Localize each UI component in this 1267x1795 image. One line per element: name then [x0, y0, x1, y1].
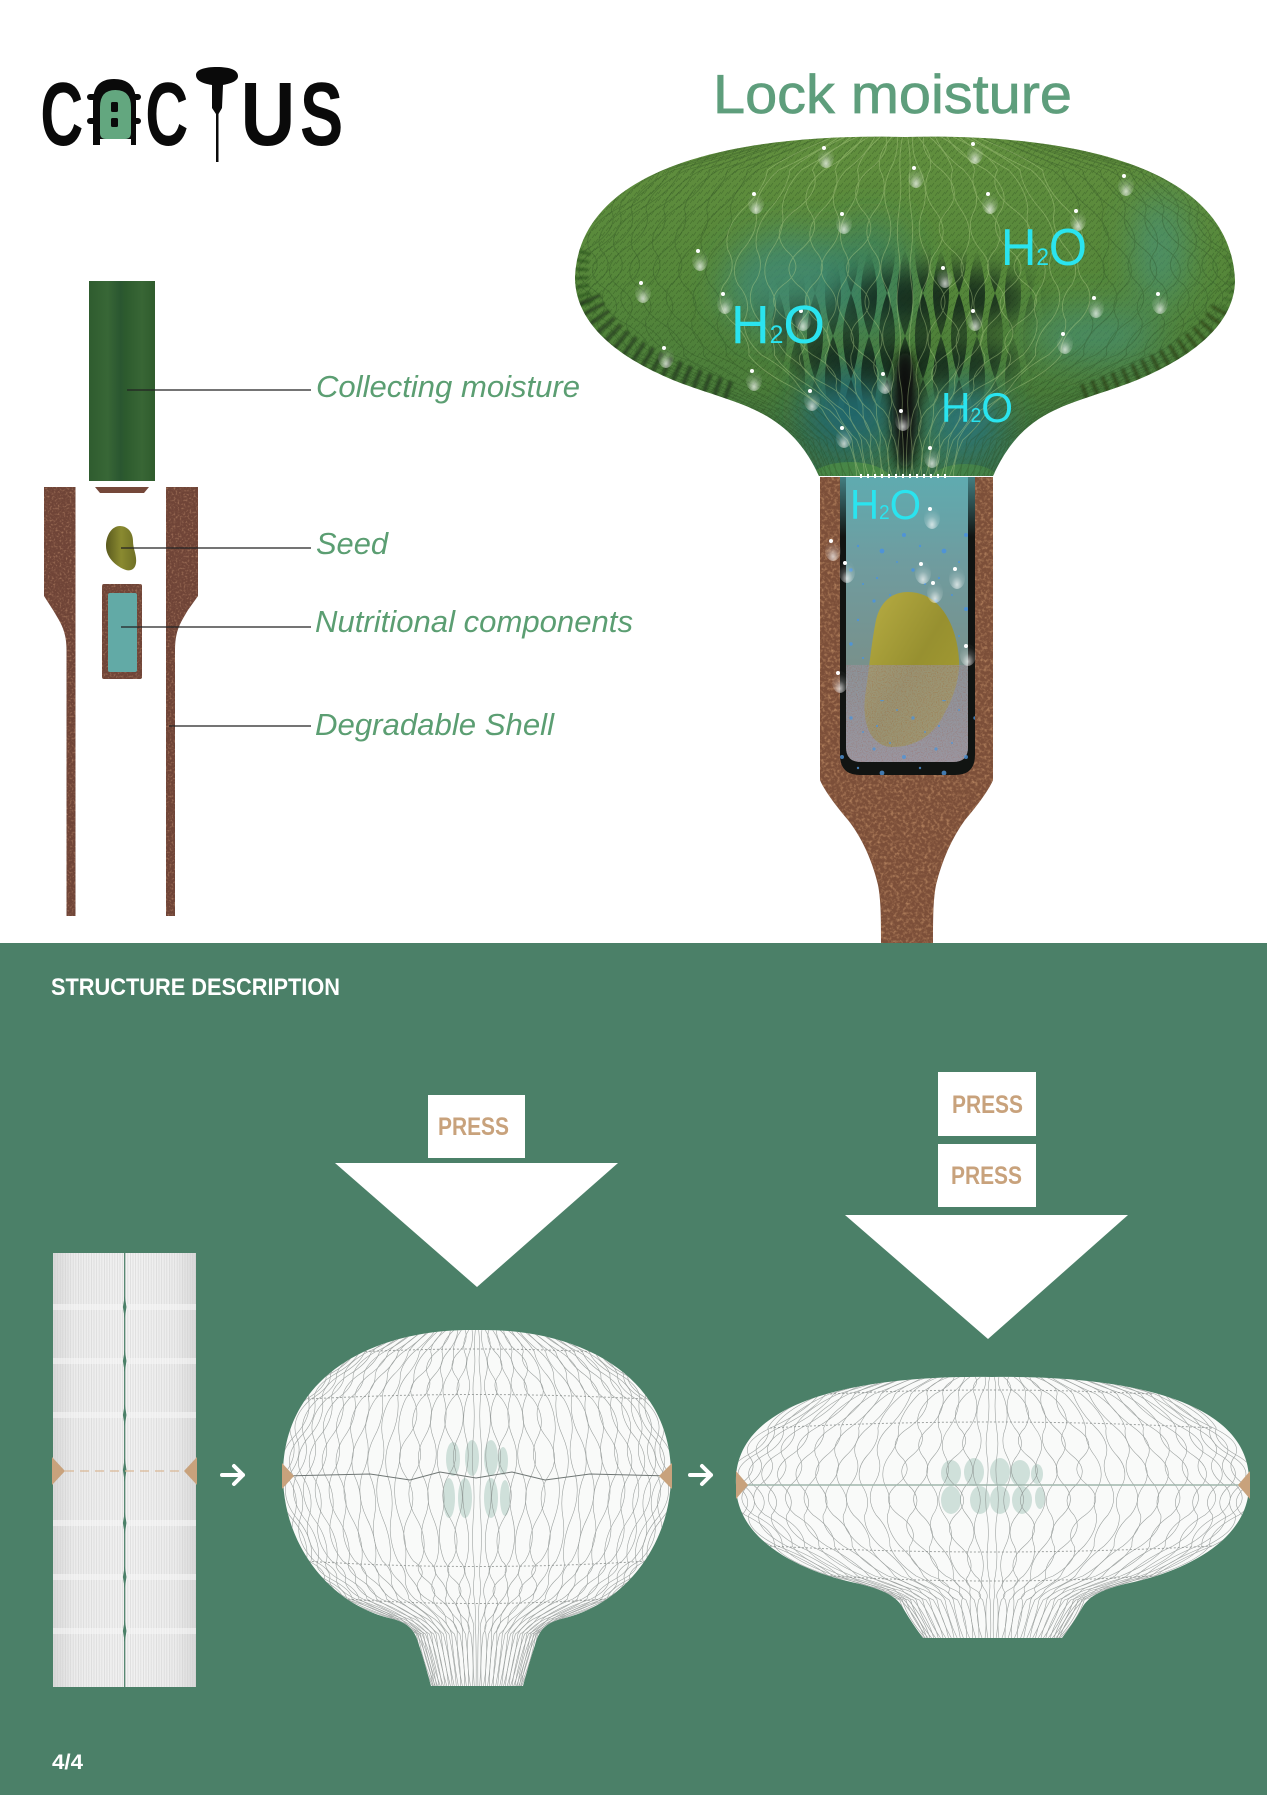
- cactus illustration cap: [570, 130, 1240, 502]
- icon: cactus letter A: [87, 79, 141, 145]
- page background: [0, 0, 1267, 943]
- dark neck core: [892, 350, 918, 470]
- leader lines: [121, 390, 311, 726]
- press block three: PRESS: [951, 1162, 1022, 1190]
- arrow: press triangle two: [845, 1215, 1128, 1339]
- part: nutritional capsule: [102, 584, 142, 679]
- part: moisture collecting bar: [89, 281, 155, 481]
- press block three: [938, 1144, 1036, 1207]
- logo: CACTUS: U: [241, 64, 295, 164]
- droplets on cap: [635, 142, 1168, 468]
- press block two: PRESS: [952, 1091, 1023, 1119]
- logo: CACTUS: C: [40, 65, 83, 165]
- logo: CACTUS: S: [300, 64, 343, 165]
- H2O labels: [731, 219, 1087, 528]
- center lens cluster: [443, 1440, 510, 1518]
- flat folded sheet: [52, 1253, 197, 1687]
- exploded structure diagram: [44, 281, 311, 916]
- logo: CACTUS: C: [145, 65, 188, 165]
- part: seed: [106, 526, 136, 570]
- balloon: half pressed: [280, 1325, 675, 1690]
- part: cap ring: [95, 487, 149, 493]
- tan joint left: [52, 1457, 65, 1485]
- balloon: fully pressed: [730, 1372, 1255, 1642]
- arrow: step one: [222, 1466, 243, 1484]
- press block one: PRESS: [438, 1113, 509, 1141]
- dark lens gaps: [755, 250, 1042, 404]
- label: H2O left: H2O: [731, 295, 825, 355]
- title: lock moisture: Lock moisture: [713, 63, 1072, 125]
- tan joint left: [736, 1471, 748, 1499]
- dark tube: [840, 477, 975, 775]
- teal glows: [725, 195, 1184, 460]
- neck base: [816, 462, 888, 476]
- logo: CACTUS: [40, 64, 343, 165]
- water chamber: [846, 477, 968, 762]
- tube droplets: [825, 507, 976, 693]
- tan joint right: [659, 1463, 672, 1489]
- label: nutritional components: Nutritional components: [315, 604, 633, 639]
- rim wedges: [577, 250, 1235, 400]
- arrow: step two: [690, 1466, 711, 1484]
- degradable shell body: [820, 477, 993, 943]
- press block one: [428, 1095, 525, 1158]
- label: H2O lower: H2O: [941, 384, 1013, 431]
- lattice lines center: [720, 137, 1090, 476]
- label: collecting moisture: Collecting moisture: [316, 369, 580, 404]
- part: degradable shell right: [166, 487, 198, 916]
- lattice lines outer: [570, 137, 1240, 476]
- cactus illustration shell and tube: [820, 476, 993, 943]
- tan joint right: [1238, 1471, 1250, 1499]
- heading: structure description: STRUCTURE DESCRIPTION: [51, 974, 340, 1001]
- page number: 4/4: [52, 1751, 83, 1774]
- arrow: press triangle one: [335, 1163, 618, 1287]
- part: degradable shell left: [44, 487, 76, 916]
- panel: structure description: [0, 943, 1267, 1795]
- label: degradable shell: Degradable Shell: [315, 707, 555, 742]
- label: seed: Seed: [316, 526, 390, 561]
- tan joint left: [282, 1463, 294, 1489]
- icon: cactus letter T: [196, 67, 238, 162]
- press block two: [938, 1072, 1036, 1136]
- center lens cluster: [941, 1458, 1045, 1514]
- tan joint right: [184, 1457, 197, 1485]
- label: H2O upper right: H2O: [1001, 219, 1087, 277]
- label: H2O tube: H2O: [850, 481, 921, 528]
